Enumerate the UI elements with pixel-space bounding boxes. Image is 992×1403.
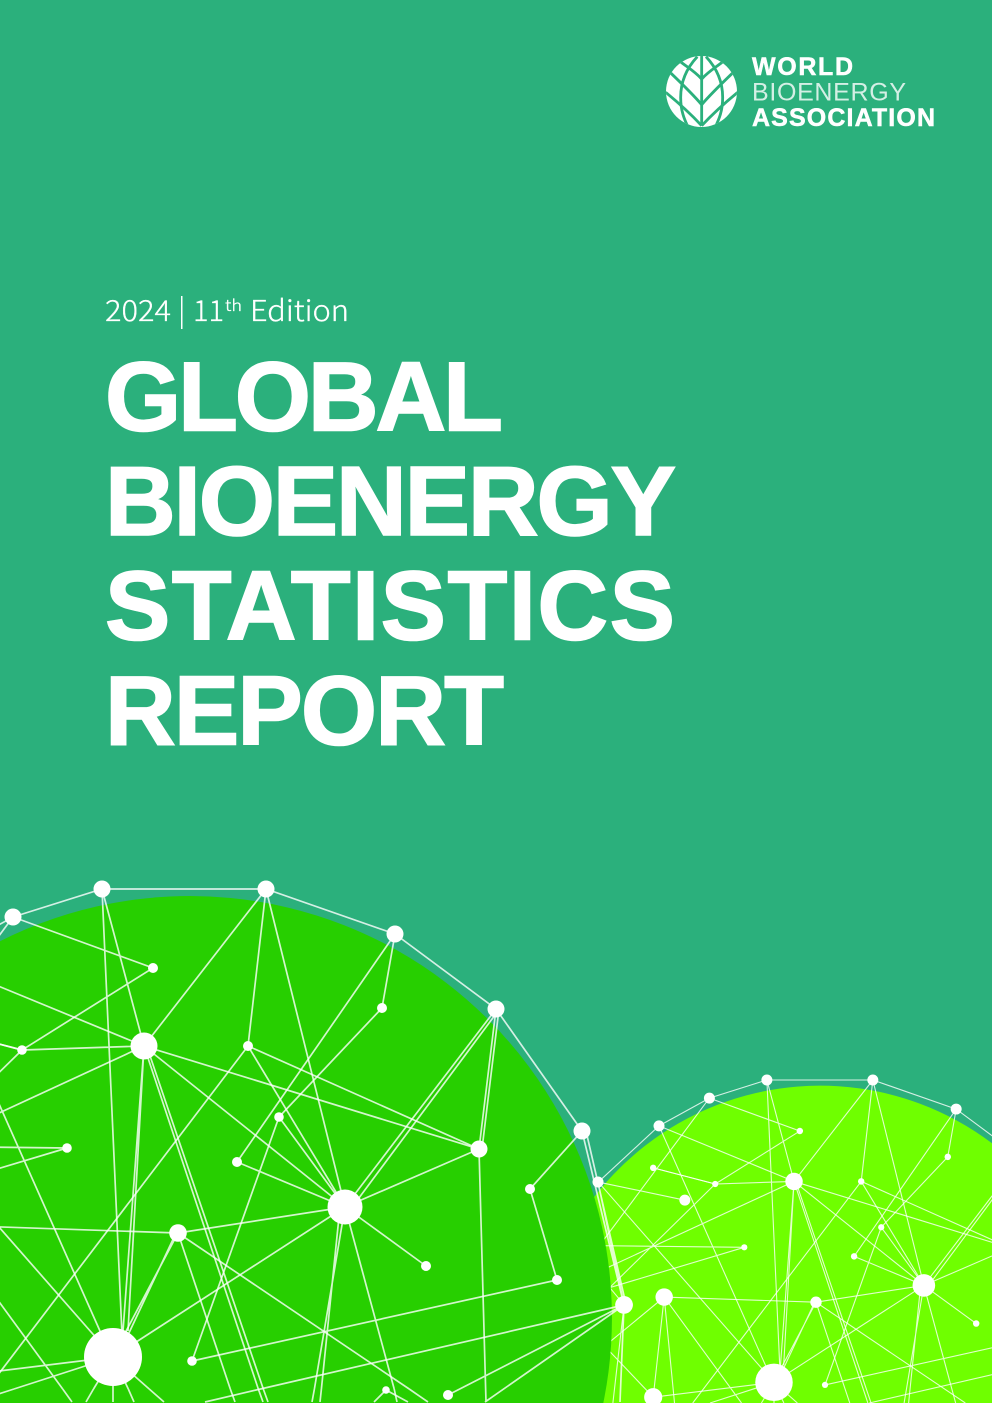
title: REPORT	[105, 656, 504, 766]
title: BIOENERGY	[105, 446, 676, 556]
light green circle	[535, 1086, 992, 1403]
title	[105, 342, 676, 766]
edition line: Edition	[250, 288, 349, 330]
edition line: th	[225, 292, 242, 316]
title: STATISTICS	[105, 550, 675, 660]
title: GLOBAL	[105, 342, 503, 452]
network: left cluster bottom links	[0, 1149, 624, 1402]
icon: leaf globe	[666, 56, 738, 129]
edition line: 11	[193, 288, 224, 330]
logo text: BIOENERGY: BIOENERGY	[752, 78, 906, 106]
logo text: ASSOCIATION: ASSOCIATION	[752, 104, 935, 132]
edition line: 2024	[105, 288, 171, 330]
edition line	[105, 288, 349, 330]
logo text: WORLD: WORLD	[752, 53, 853, 81]
network: left cluster bottom nodes	[382, 1386, 453, 1400]
logo: World Bioenergy Association	[666, 56, 934, 127]
